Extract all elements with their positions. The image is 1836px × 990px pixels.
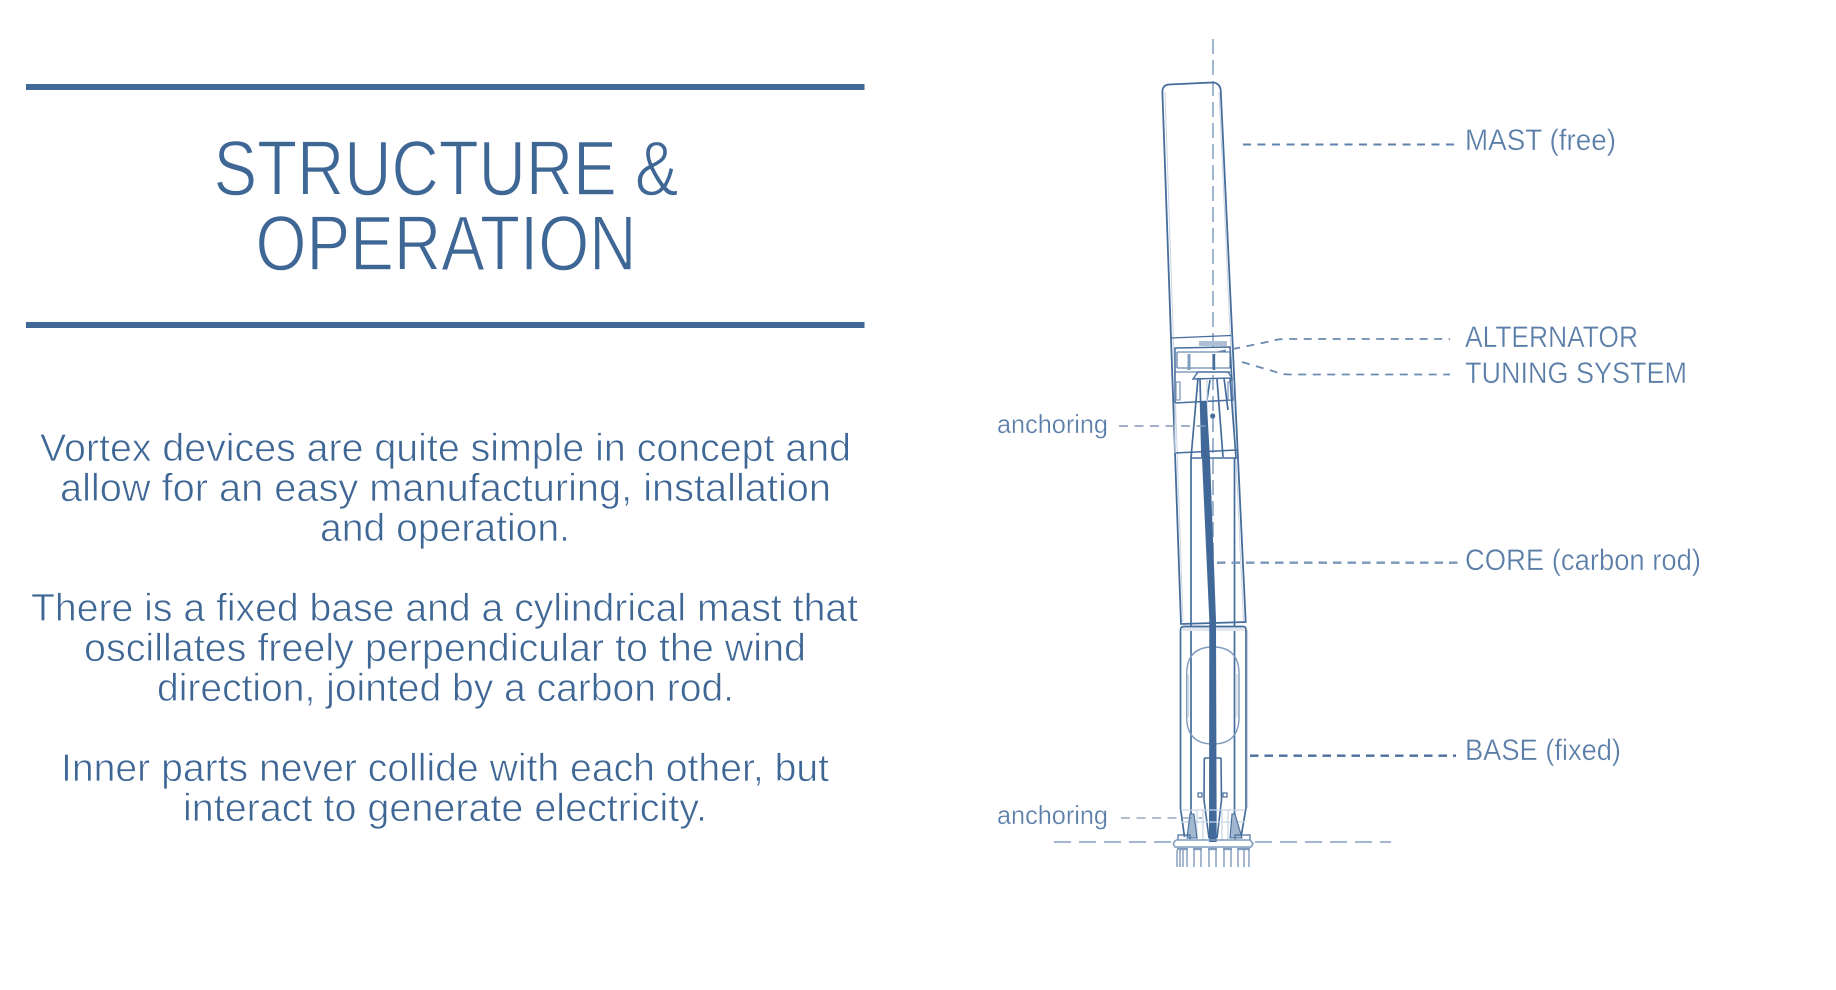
mast outline xyxy=(1162,82,1246,624)
callout: lower anchoring: anchoring xyxy=(997,800,1108,830)
callout: mast: MAST (free) xyxy=(1465,124,1616,157)
inner guide tubes xyxy=(1191,458,1234,815)
diagram: vortex device cross-section xyxy=(1054,39,1391,867)
paragraph 2: direction, jointed by a carbon rod. xyxy=(157,667,734,710)
carbon rod core xyxy=(1201,401,1217,842)
paragraph 1: Vortex devices are quite simple in concept and xyxy=(40,427,851,470)
callout: core: CORE (carbon rod) xyxy=(1465,544,1701,577)
callout: alternator xyxy=(1218,321,1638,354)
panel: description text xyxy=(31,427,858,830)
foundation flange xyxy=(1173,835,1253,867)
paragraph 1 xyxy=(40,427,851,550)
panel: heading xyxy=(26,84,864,328)
paragraph 2: There is a fixed base and a cylindrical mast that xyxy=(31,587,858,630)
callouts xyxy=(997,124,1701,830)
paragraph 3: interact to generate electricity. xyxy=(183,787,707,830)
title xyxy=(214,124,678,287)
ground line xyxy=(1054,841,1391,843)
anchor bolts in base xyxy=(1181,793,1245,840)
paragraph 3: Inner parts never collide with each other, but xyxy=(61,747,829,790)
paragraph 2: oscillates freely perpendicular to the wind xyxy=(84,627,806,670)
top rule xyxy=(26,84,864,90)
title: OPERATION xyxy=(256,199,636,287)
paragraph 3 xyxy=(61,747,829,830)
rod sleeve xyxy=(1204,758,1222,838)
paragraph 1: allow for an easy manufacturing, installation xyxy=(60,467,831,510)
base outline xyxy=(1180,626,1248,837)
callout: tuning system xyxy=(1242,357,1687,390)
callout: alternator: ALTERNATOR xyxy=(1465,321,1638,354)
paragraph 2 xyxy=(31,587,858,710)
callout: base: BASE (fixed) xyxy=(1465,734,1621,767)
title: STRUCTURE & xyxy=(214,124,678,212)
access opening xyxy=(1187,647,1239,744)
centre axis line xyxy=(1212,39,1214,842)
paragraph 1: and operation. xyxy=(320,507,570,550)
callout: tuning system: TUNING SYSTEM xyxy=(1465,357,1687,390)
callout: upper anchoring: anchoring xyxy=(997,409,1108,439)
bottom rule xyxy=(26,322,864,328)
alternator and tuning assembly xyxy=(1171,336,1237,458)
